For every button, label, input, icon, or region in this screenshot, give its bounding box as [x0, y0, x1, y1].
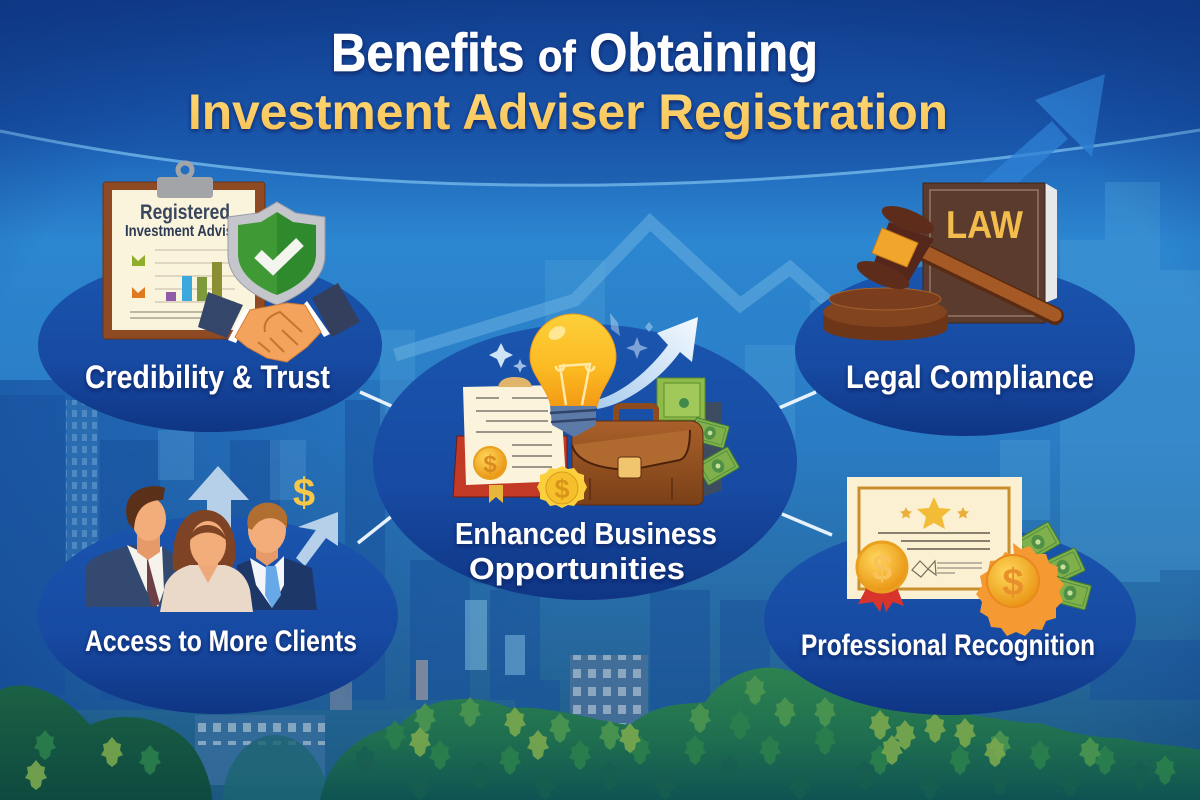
connector lines [358, 392, 832, 543]
icon: arrows and dollar sign: $ [293, 471, 315, 515]
icon: money stack [657, 378, 740, 497]
panel: credibility and trust [38, 163, 382, 432]
icon: briefcase [572, 406, 703, 505]
icon: clipboard [103, 163, 265, 339]
icon: gold seal: $ [1002, 562, 1024, 604]
icon: law book [923, 183, 1057, 323]
label [455, 516, 717, 586]
icon: coin ribbon [857, 542, 907, 612]
title: Investment Adviser Registration [188, 84, 948, 140]
window buildings [66, 400, 98, 570]
title [188, 23, 948, 140]
icon: law book: LAW [946, 204, 1023, 247]
person left [85, 486, 182, 607]
icon: light bulb [530, 314, 616, 437]
icon: small coin [537, 466, 587, 508]
icon: money [1015, 522, 1092, 610]
decorative top curve [0, 0, 1200, 185]
icon: three business people [85, 486, 317, 612]
title: Benefits of Obtaining [331, 23, 818, 83]
label: Access to More Clients [85, 625, 357, 658]
icon: document: $ [483, 451, 497, 478]
icon: arrows and dollar sign [188, 466, 338, 566]
icon: coin ribbon: $ [872, 547, 892, 588]
icon: clipboard: Registered [140, 201, 230, 224]
label: Opportunities [469, 551, 685, 586]
icon: document [453, 377, 567, 503]
city skyline [0, 182, 1200, 785]
trees [0, 668, 1200, 800]
label: Professional Recognition [801, 629, 1095, 662]
panel: legal compliance [795, 183, 1135, 436]
icon: gold seal [976, 543, 1064, 636]
panel: professional recognition [764, 477, 1136, 715]
icon: handshake [198, 283, 360, 362]
person right [237, 503, 317, 610]
label: Legal Compliance [846, 359, 1094, 395]
icon: rising arrow [596, 317, 698, 409]
panel: access to more clients [38, 466, 398, 714]
icon: small coin: $ [554, 474, 570, 504]
large background arrow line [395, 222, 860, 355]
icon: certificate [847, 477, 1022, 599]
person center [160, 510, 253, 612]
icon: sparkles [489, 313, 653, 373]
icon: gavel [823, 200, 1055, 340]
label: Enhanced Business [455, 516, 717, 551]
icon: clipboard: Investment Advis [125, 223, 233, 240]
label: Credibility & Trust [85, 359, 330, 395]
icon: shield [228, 202, 325, 305]
panel: enhanced business opportunities [373, 313, 797, 600]
